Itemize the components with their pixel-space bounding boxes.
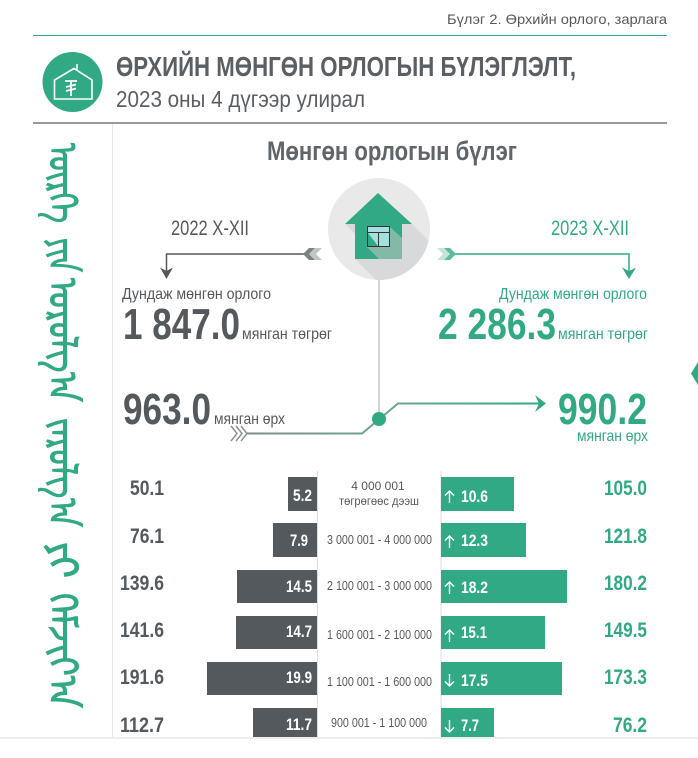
year label 2022: 2022 X-XII (171, 217, 249, 240)
chart row: 1 100 001 - 1 600 000: 1 100 001 - 1 600 000 (327, 674, 432, 689)
chart row: 2 100 001 - 3 000 000: 2 100 001 - 3 000 000 (327, 578, 432, 593)
chart row: 4 000 001 and above (130, 477, 647, 511)
icon: house with tugrik (42, 52, 102, 112)
average income 2022 (122, 286, 332, 349)
chart row: 3 000 001 - 4 000 000: 12.3 (461, 531, 488, 550)
chart row: 1 100 001 - 1 600 000: 173.3 (604, 666, 647, 689)
chart row: 1 100 001 - 1 600 000: 19.9 (286, 668, 312, 687)
footer rule (0, 737, 698, 739)
sidebar divider (112, 124, 113, 738)
chart row: 2 100 001 - 3 000 000 (120, 570, 647, 603)
average income 2022: 1 847.0 (123, 300, 240, 349)
vertical Mongolian script title: ᠣᠷᠣᠯᠭ᠎ᠠ (39, 278, 84, 402)
average income 2023: мянган төгрөг (558, 326, 648, 343)
side marker (691, 362, 698, 385)
chart row: 900 001 - 1 100 000 (120, 708, 647, 737)
header bottom rule (33, 122, 667, 124)
households 2022: 963.0 (123, 385, 211, 434)
chart row: 1 600 001 - 2 100 000: 141.6 (120, 619, 164, 642)
chart row: 2 100 001 - 3 000 000: 139.6 (120, 572, 164, 595)
chart row: 4 000 001 and above: 105.0 (604, 477, 647, 500)
chart row: 4 000 001 and above: 5.2 (293, 486, 312, 505)
vertical Mongolian script title: ᠶᠢ (40, 542, 84, 578)
average income 2022: мянган төгрөг (242, 326, 332, 343)
chart row: 4 000 001 and above: төгрөгөөс дээш (339, 494, 419, 508)
average income 2023 (438, 286, 648, 349)
trend line with arrow (231, 395, 546, 441)
chart row: 2 100 001 - 3 000 000: 180.2 (604, 572, 647, 595)
chart row: 3 000 001 - 4 000 000: 76.1 (130, 525, 164, 548)
section heading: Мөнгөн орлогын бүлэг (267, 136, 517, 166)
chart row: 3 000 001 - 4 000 000: 121.8 (604, 525, 647, 548)
chart row: 4 000 001 and above: 10.6 (461, 487, 488, 506)
chart row: 3 000 001 - 4 000 000 (130, 523, 647, 557)
vertical Mongolian script title: ᠬᠡᠮᠵᠢᠶ᠎ᠠ (40, 593, 84, 708)
average income 2023: 2 286.3 (438, 300, 556, 349)
chart row: 900 001 - 1 100 000: 900 001 - 1 100 000 (331, 715, 427, 730)
chart row: 1 600 001 - 2 100 000 (120, 616, 647, 649)
households 2023: мянган өрх (577, 428, 648, 445)
chapter label: Бүлэг 2. Өрхийн орлого, зарлага (447, 11, 667, 27)
chart axes (318, 471, 441, 738)
vertical Mongolian script title: ᠵᠠᠷᠤᠯᠭ᠎ᠠ (39, 418, 84, 527)
vertical Mongolian script title (39, 143, 84, 708)
chart row: 1 600 001 - 2 100 000: 1 600 001 - 2 100 000 (327, 627, 432, 642)
chart row: 4 000 001 and above: 50.1 (130, 477, 164, 500)
chart row: 2 100 001 - 3 000 000: 18.2 (461, 578, 488, 597)
chart row: 3 000 001 - 4 000 000: 7.9 (290, 531, 308, 550)
chart row: 1 100 001 - 1 600 000: 17.5 (461, 671, 488, 690)
vertical Mongolian script title: ᠥᠷᠬᠡ (39, 143, 84, 223)
arrow: 2022 (160, 248, 322, 279)
chart row: 4 000 001 and above: 4 000 001 (351, 479, 405, 493)
chart row: 2 100 001 - 3 000 000: 14.5 (286, 577, 312, 596)
chart row: 1 100 001 - 1 600 000 (120, 662, 647, 695)
chart row: 900 001 - 1 100 000: 76.2 (613, 714, 647, 737)
icon: central house (328, 178, 430, 280)
chart row: 1 600 001 - 2 100 000: 15.1 (461, 623, 487, 642)
vertical Mongolian script title: ᠶᠢᠨ (40, 238, 84, 272)
chart row: 900 001 - 1 100 000: 11.7 (286, 715, 312, 734)
subtitle: 2023 оны 4 дүгээр улирал (116, 86, 365, 112)
households 2022 (123, 385, 285, 434)
chart row: 900 001 - 1 100 000: 112.7 (120, 714, 164, 737)
chart row: 1 100 001 - 1 600 000: 191.6 (120, 666, 164, 689)
arrow: 2023 (437, 248, 636, 279)
chart row: 900 001 - 1 100 000: 7.7 (461, 716, 479, 735)
households 2022: мянган өрх (214, 411, 285, 428)
year label 2023: 2023 X-XII (551, 217, 629, 240)
chart row: 1 600 001 - 2 100 000: 149.5 (604, 619, 647, 642)
connector: house to trend dot (378, 280, 380, 419)
header rule (33, 35, 667, 36)
chart row: 1 600 001 - 2 100 000: 14.7 (286, 622, 312, 641)
title: ӨРХИЙН МӨНГӨН ОРЛОГЫН БҮЛЭГЛЭЛТ, (116, 50, 576, 82)
chart row: 3 000 001 - 4 000 000: 3 000 001 - 4 000 000 (327, 532, 432, 547)
households 2023: 990.2 (558, 385, 647, 434)
average income 2023: Дундаж мөнгөн орлого (499, 286, 647, 303)
average income 2022: Дундаж мөнгөн орлого (122, 286, 271, 303)
households 2023 (558, 385, 648, 445)
